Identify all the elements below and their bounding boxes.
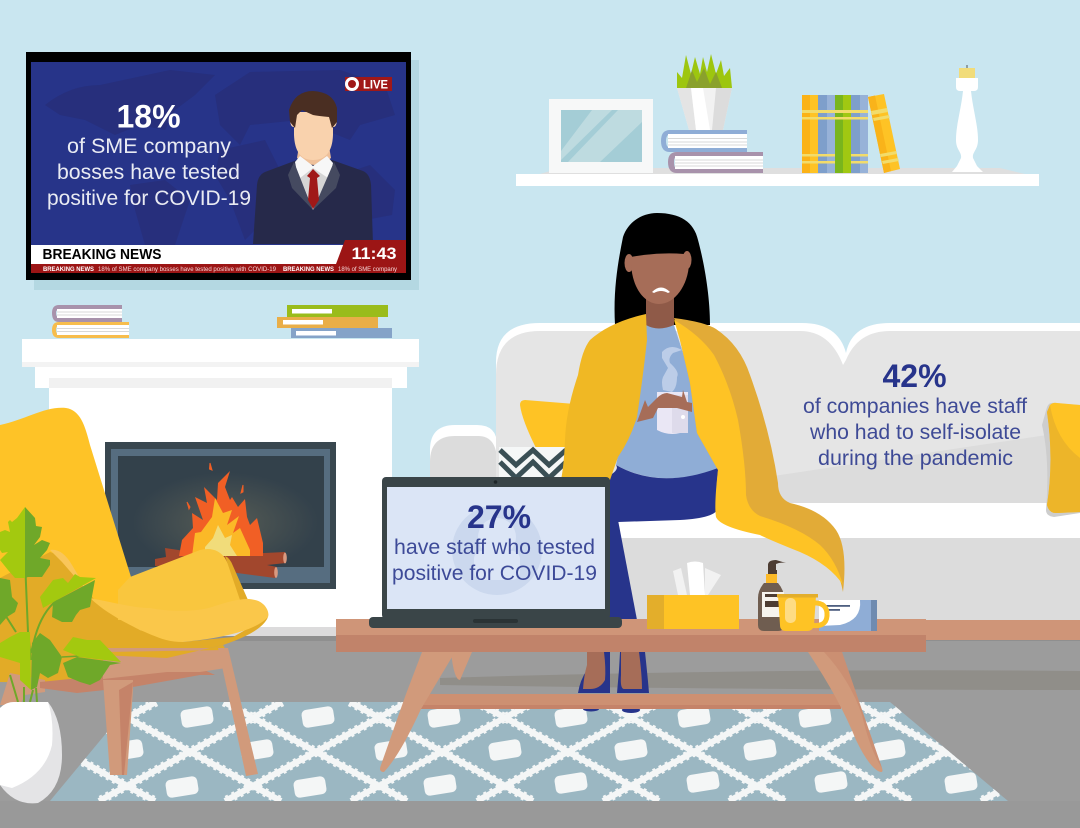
- chair seat: [90, 598, 268, 642]
- mantel books left: [52, 305, 129, 338]
- tissue box: [647, 562, 739, 629]
- picture frame: [549, 99, 653, 173]
- blanket right side: [674, 318, 844, 592]
- face: [631, 253, 689, 304]
- breaking news bar: 18% of SME company bosses have tested positive with COVID-19: [98, 266, 277, 273]
- statistic: 42%: [803, 358, 1027, 470]
- right leg: [808, 652, 882, 772]
- trousers: [600, 465, 718, 525]
- wall shelf with objects: [516, 54, 1039, 186]
- chair frame: [0, 645, 226, 705]
- statistic: 42%: of companies have staff: [803, 395, 1027, 418]
- upright and leaning books: [802, 94, 900, 173]
- sad mouth: [652, 288, 670, 293]
- statistic: 18%: [47, 98, 251, 210]
- chair legs: [103, 680, 133, 775]
- wall: [0, 0, 1080, 640]
- table leg behind: [451, 652, 472, 680]
- fireplace insert: [105, 442, 336, 589]
- breaking news bar: [31, 240, 406, 273]
- world map: [45, 70, 395, 245]
- leaf: right: [40, 574, 96, 622]
- statistic: 27%: 27%: [467, 499, 531, 535]
- leaf: top: [0, 507, 50, 578]
- live badge: [345, 77, 392, 92]
- shirt: [616, 325, 720, 478]
- hand sanitiser bottle: [758, 560, 786, 631]
- statistic: 27%: positive for COVID-19: [392, 562, 597, 585]
- yellow cushion left: [520, 400, 575, 450]
- leaf: left: [0, 578, 18, 625]
- hands: [637, 390, 692, 422]
- television: [26, 52, 419, 290]
- ears: [624, 251, 692, 272]
- chevron cushion: [499, 447, 567, 480]
- medicine box: [819, 600, 877, 631]
- statistic: 27%: [392, 499, 597, 585]
- sofa arm: [430, 425, 497, 480]
- statistic: 18%: of SME company: [67, 135, 232, 158]
- logs: [155, 548, 287, 578]
- mantel books right: [277, 305, 392, 338]
- laptop: [369, 477, 622, 628]
- floor: [0, 636, 1080, 828]
- neck: [646, 290, 674, 335]
- leaf: lower left: [0, 632, 62, 690]
- breaking news bar: BREAKING NEWS: [42, 247, 162, 263]
- statistic: 18%: bosses have tested: [57, 161, 240, 184]
- breaking news bar: BREAKING NEWS: [43, 266, 95, 273]
- book stack under plant: [661, 130, 763, 173]
- news screen: [31, 62, 406, 273]
- screen watermark: [452, 505, 542, 595]
- fireplace: [22, 339, 419, 636]
- sofa: [430, 323, 1080, 623]
- news anchor: [253, 91, 373, 244]
- live badge: LIVE: [363, 80, 388, 92]
- stems: [2, 512, 57, 702]
- yellow mug: [777, 594, 827, 631]
- chair back highlight: [50, 550, 88, 592]
- potted plant: [677, 54, 732, 130]
- chair back: [0, 408, 131, 640]
- statistic: 42%: 42%: [882, 358, 947, 394]
- lower leg: [590, 500, 637, 620]
- statistic: 42%: during the pandemic: [818, 447, 1013, 470]
- feet and shoes: [578, 652, 649, 713]
- blanket left side: [561, 314, 647, 480]
- leaf: lower right: [63, 637, 121, 685]
- statistic: 27%: have staff who tested: [394, 536, 595, 559]
- hair: [615, 213, 710, 325]
- armchair: [0, 408, 268, 776]
- left leg: [380, 652, 455, 772]
- potted plant: [0, 507, 121, 803]
- candle: [952, 65, 983, 172]
- yellow cushion right: [1042, 403, 1080, 517]
- breaking news bar: BREAKING NEWS: [283, 266, 335, 273]
- person with blanket: [561, 213, 844, 620]
- breaking news bar: 11:43: [352, 244, 396, 263]
- statistic: 18%: 18%: [116, 98, 181, 134]
- chair shell: [0, 552, 268, 683]
- coffee table: [336, 619, 1080, 772]
- fire: [179, 463, 263, 556]
- statistic: 42%: who had to self-isolate: [809, 421, 1021, 444]
- mug and steam: [637, 347, 692, 434]
- statistic: 18%: positive for COVID-19: [47, 187, 251, 210]
- white vase: [0, 702, 62, 803]
- rug: [50, 702, 1008, 801]
- breaking news bar: 18% of SME company: [338, 266, 398, 273]
- chair arm cushion: [118, 549, 247, 620]
